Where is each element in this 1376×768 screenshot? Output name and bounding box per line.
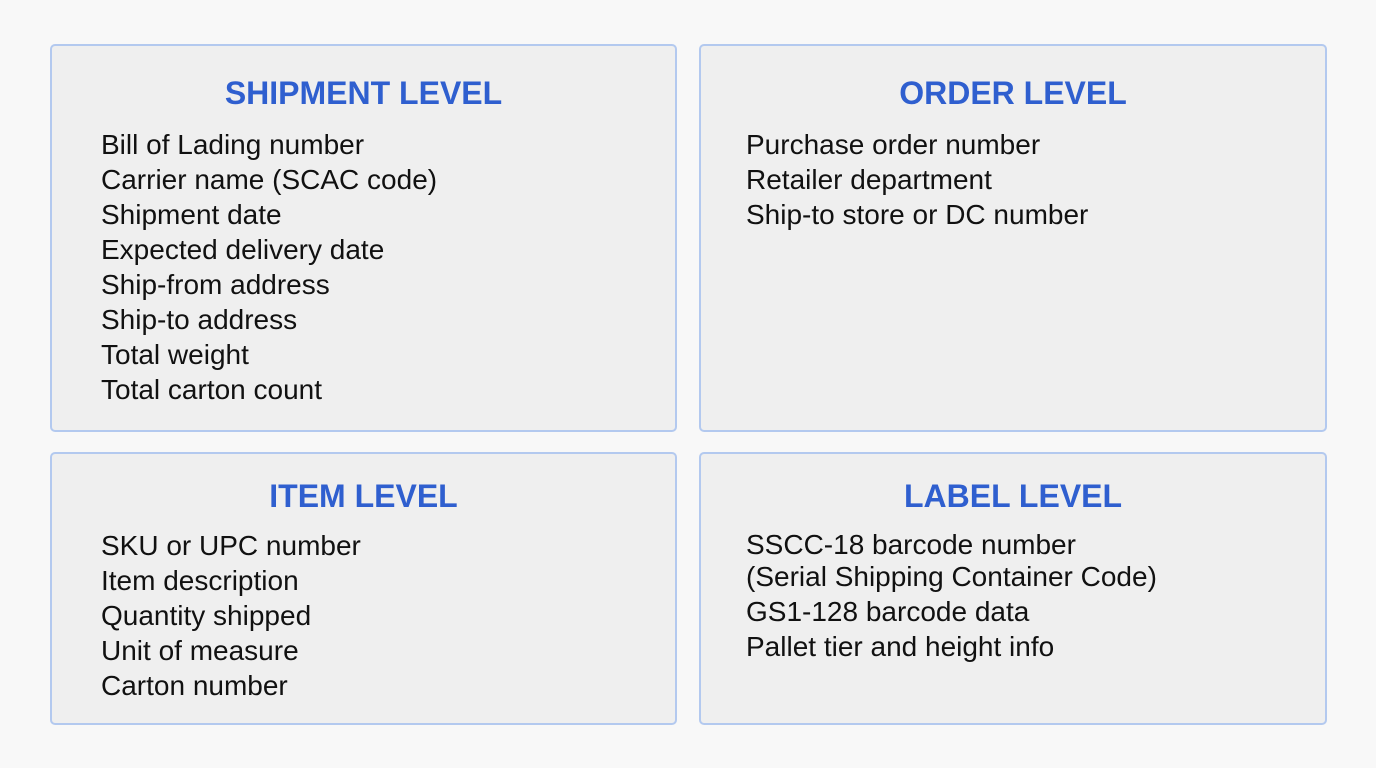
list: shipment fields: Total weight <box>101 339 249 370</box>
heading: shipment level: SHIPMENT LEVEL <box>225 75 502 111</box>
list: item fields: Quantity shipped <box>101 600 311 631</box>
list: shipment fields <box>101 129 437 405</box>
list: shipment fields: Bill of Lading number <box>101 129 364 160</box>
list: label fields: SSCC-18 barcode number <box>746 529 1076 560</box>
list: shipment fields: Shipment date <box>101 199 282 230</box>
heading: order level: ORDER LEVEL <box>899 75 1127 111</box>
list: shipment fields: Ship-to address <box>101 304 297 335</box>
list: item fields: Carton number <box>101 670 288 701</box>
heading: item level: ITEM LEVEL <box>269 478 458 514</box>
list: shipment fields: Carrier name (SCAC code) <box>101 164 437 195</box>
list: order fields: Ship-to store or DC number <box>746 199 1088 230</box>
list: item fields: Item description <box>101 565 299 596</box>
list: shipment fields: Total carton count <box>101 374 322 405</box>
list: label fields: Pallet tier and height info <box>746 631 1054 662</box>
panel: order level <box>699 44 1327 432</box>
panel: label level <box>699 452 1327 725</box>
panel: item level <box>50 452 677 725</box>
list: order fields: Purchase order number <box>746 129 1040 160</box>
list: item fields: SKU or UPC number <box>101 530 361 561</box>
list: label fields <box>746 529 1157 662</box>
list: order fields: Retailer department <box>746 164 992 195</box>
list: item fields: Unit of measure <box>101 635 299 666</box>
list: shipment fields: Expected delivery date <box>101 234 384 265</box>
list: item fields <box>101 530 361 701</box>
list: label fields: (Serial Shipping Container Code) <box>746 561 1157 592</box>
panel: shipment level <box>50 44 677 432</box>
list: order fields <box>746 129 1088 230</box>
list: shipment fields: Ship-from address <box>101 269 330 300</box>
list: label fields: GS1-128 barcode data <box>746 596 1029 627</box>
heading: label level: LABEL LEVEL <box>904 478 1122 514</box>
